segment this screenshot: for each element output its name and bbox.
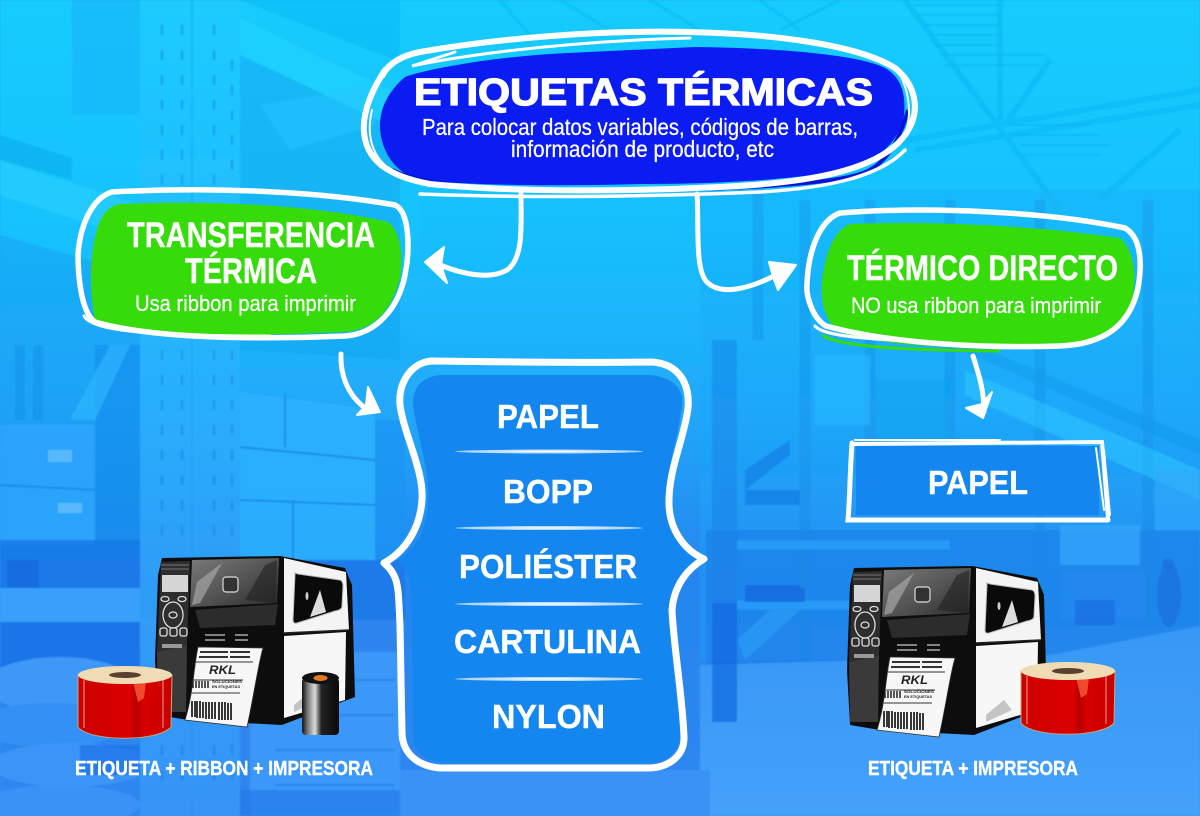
heading: TRANSFERENCIA — [127, 216, 375, 255]
material labels: CARTULINA — [454, 623, 641, 660]
heading: ETIQUETAS TÉRMICAS — [414, 70, 873, 114]
material labels — [454, 398, 641, 735]
heading: TÉRMICA — [185, 251, 317, 291]
panel: materials list — [384, 361, 704, 768]
subtext: Usa ribbon para imprimir — [135, 291, 356, 316]
icon: ribbon roll — [302, 672, 339, 735]
rack column — [140, 0, 240, 816]
arrow: title to termico directo — [697, 194, 796, 290]
left mid boxes — [0, 425, 95, 545]
arrow: transferencia to materials — [341, 354, 380, 415]
icon: label roll right — [1021, 662, 1115, 734]
printed label: RKL — [209, 663, 236, 677]
printed label — [185, 647, 263, 727]
floor — [700, 626, 1200, 816]
ceiling beams — [880, 0, 1200, 210]
caption left: ETIQUETA + RIBBON + IMPRESORA — [75, 758, 373, 780]
printed label: SOLUCIONES — [904, 689, 934, 694]
printed label: EN ETIQUETAS — [212, 684, 240, 689]
material labels: PAPEL — [497, 398, 599, 435]
panel: termico directo — [807, 210, 1140, 351]
printer right — [847, 566, 1047, 737]
printed label: SOLUCIONES — [212, 679, 242, 684]
caption right: ETIQUETA + IMPRESORA — [868, 758, 1078, 780]
icon: label roll left — [78, 666, 172, 738]
subheading: Para colocar datos variables, códigos de barras, — [422, 114, 858, 140]
material labels: NYLON — [492, 698, 605, 735]
printed label: EN ETIQUETAS — [904, 694, 932, 699]
heading — [127, 216, 375, 291]
subheading: información de producto, etc — [511, 136, 774, 162]
arrow: title to transferencia — [425, 194, 521, 283]
material labels: BOPP — [503, 473, 593, 510]
material labels: POLIÉSTER — [459, 548, 637, 585]
printer left — [155, 556, 355, 727]
panel: papel — [848, 440, 1110, 520]
left bottom bands — [0, 540, 140, 590]
heading: TÉRMICO DIRECTO — [847, 248, 1118, 288]
subtext: NO usa ribbon para imprimir — [851, 293, 1101, 318]
boxes behind left printer — [240, 392, 375, 560]
panel: transferencia termica — [78, 190, 408, 338]
title panel — [364, 32, 915, 196]
printed label: RKL — [901, 673, 928, 687]
arrow: directo to papel — [966, 356, 992, 418]
right racking — [700, 190, 1200, 660]
left top boxes — [72, 0, 140, 170]
subheading — [422, 114, 858, 162]
printed label — [877, 657, 955, 737]
scribble outline — [364, 32, 915, 196]
label: PAPEL — [928, 464, 1028, 501]
